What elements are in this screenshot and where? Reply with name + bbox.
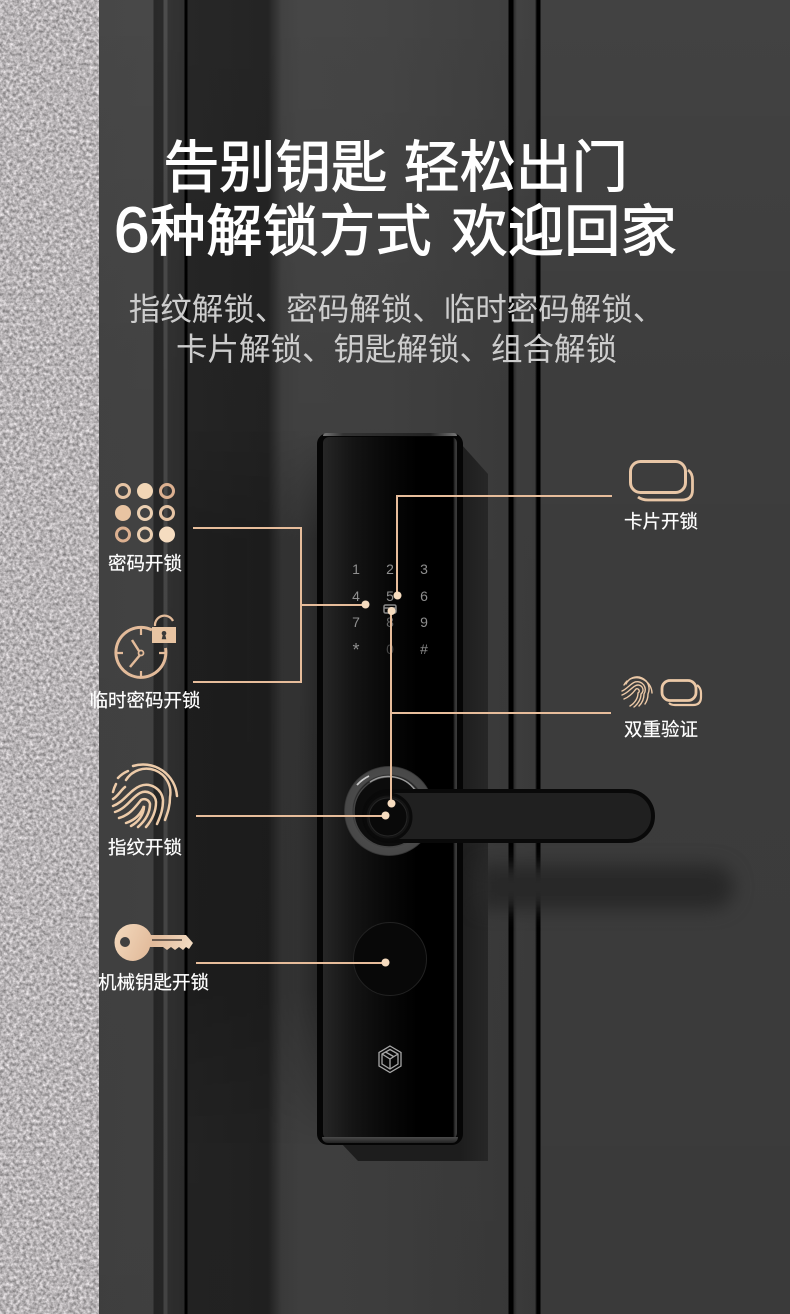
subtitle	[129, 291, 664, 367]
keypad digits: 2	[386, 561, 394, 577]
keypad digits: *	[352, 640, 360, 660]
wall texture	[0, 0, 99, 1314]
label: temporary password unlock: 临时密码开锁	[89, 690, 201, 711]
keypad digits: 5	[386, 588, 394, 604]
title line 1: 告别钥匙 轻松出门	[163, 136, 628, 199]
lock top rim	[323, 433, 457, 436]
keypad digits: 8	[386, 614, 394, 630]
smart lock body	[317, 433, 463, 1145]
label: mechanical key unlock: 机械钥匙开锁	[98, 972, 209, 993]
keypad digits: 6	[420, 588, 428, 604]
door shadow left of lock	[278, 469, 317, 1088]
title line 2: 6种解锁方式 欢迎回家	[114, 194, 677, 266]
keypad digits: 4	[352, 588, 360, 604]
label: password unlock: 密码开锁	[108, 553, 182, 574]
handle shadow on door	[478, 865, 734, 909]
keypad digits: #	[420, 641, 428, 657]
label: fingerprint unlock: 指纹开锁	[108, 837, 182, 858]
keypad digits: 9	[420, 614, 428, 630]
subtitle: 卡片解锁、钥匙解锁、组合解锁	[176, 331, 617, 367]
label: dual verification: 双重验证	[624, 719, 698, 740]
label: card unlock: 卡片开锁	[624, 511, 698, 532]
keypad digits: 0	[386, 641, 394, 657]
keypad digits: 7	[352, 614, 360, 630]
lock shadow on door	[340, 442, 488, 1161]
keypad digits: 1	[352, 561, 360, 577]
lock front face	[323, 437, 457, 1139]
keypad digits: 3	[420, 561, 428, 577]
lock bottom rim	[322, 1137, 458, 1143]
subtitle: 指纹解锁、密码解锁、临时密码解锁、	[129, 291, 664, 327]
